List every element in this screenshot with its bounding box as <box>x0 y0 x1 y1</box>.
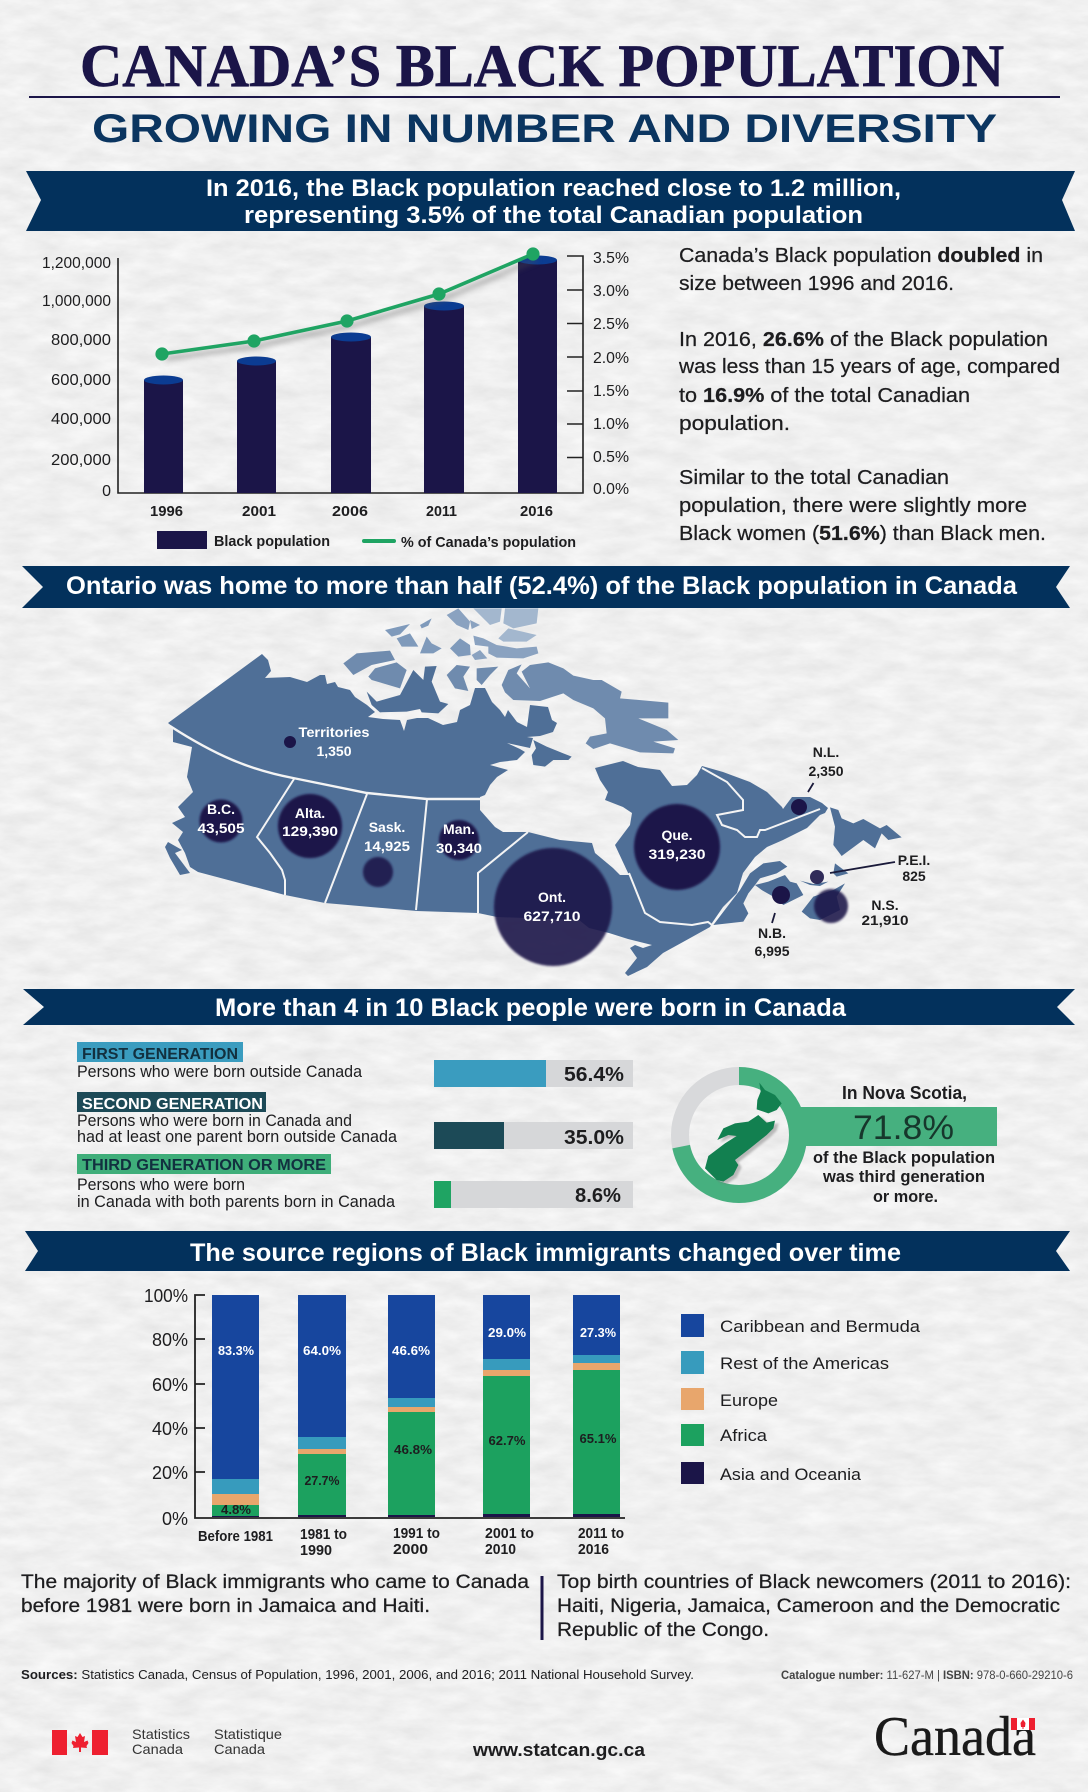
y axis labels: 60% <box>152 1375 188 1395</box>
text block: key facts: Canada’s Black population doubled in <box>679 244 1043 267</box>
province labels: 6,995 <box>754 943 790 959</box>
segment values: 27.3% <box>580 1325 616 1340</box>
text block: top birth countries: Republic of the Congo. <box>557 1620 769 1641</box>
period labels: 1990 <box>300 1542 332 1559</box>
period labels <box>198 1525 624 1559</box>
province labels <box>198 724 930 959</box>
Vancouver Island and eastern provinces <box>165 807 902 925</box>
banner: source regions: The source regions of Black immigrants changed over time <box>190 1239 901 1267</box>
right axis labels: 0.0% <box>593 481 629 498</box>
province labels: 1,350 <box>316 743 352 759</box>
left axis labels: 600,000 <box>51 372 111 389</box>
bar: 1981 to 1990 <box>298 1295 346 1517</box>
x axis labels: 2001 <box>242 503 276 520</box>
legend: regions: Africa <box>720 1426 768 1445</box>
subtitle: GROWING IN NUMBER AND DIVERSITY <box>92 107 997 151</box>
legend: regions: Rest of the Americas <box>720 1354 889 1373</box>
callout: Nova Scotia: of the Black population <box>813 1148 995 1167</box>
Statistics Canada logo: Statistique <box>214 1726 282 1742</box>
Statistics Canada logo: Canada <box>132 1741 183 1757</box>
province labels: 627,710 <box>524 908 581 924</box>
period labels: 2001 to <box>485 1525 534 1542</box>
chart legend <box>157 531 576 551</box>
Canada wordmark: Canada <box>874 1706 1036 1768</box>
segment values: 46.6% <box>392 1343 430 1358</box>
text block: top birth countries <box>557 1572 1071 1641</box>
third generation <box>77 1154 633 1211</box>
y axis labels: 40% <box>152 1419 188 1439</box>
callout: Nova Scotia: or more. <box>873 1187 938 1206</box>
right axis labels: 0.5% <box>593 449 629 466</box>
bars <box>144 260 557 493</box>
province labels: N.S. <box>871 897 899 913</box>
x axis labels: 1996 <box>150 503 183 520</box>
second generation: Persons who were born in Canada and <box>77 1112 352 1130</box>
banner: born in Canada: More than 4 in 10 Black people were born in Canada <box>215 994 847 1022</box>
banner: population headline: representing 3.5% of the total Canadian population <box>244 202 863 229</box>
banner: population headline: In 2016, the Black population reached close to 1.2 million, <box>206 175 901 202</box>
left axis labels: 1,200,000 <box>42 255 111 272</box>
right axis labels: 3.0% <box>593 283 629 300</box>
province labels: Man. <box>443 821 475 837</box>
left axis labels: 1,000,000 <box>42 293 111 310</box>
segment values: 64.0% <box>303 1343 341 1358</box>
text block: key facts: Similar to the total Canadian <box>679 466 949 489</box>
Statistics Canada logo: Statistics <box>132 1726 190 1742</box>
banner: born in Canada <box>23 989 1075 1025</box>
right axis labels: 1.5% <box>593 383 629 400</box>
callout: Nova Scotia: was third generation <box>822 1167 985 1186</box>
chart legend: % of Canada’s population <box>401 534 576 551</box>
catalogue number: Catalogue number: 11-627-M | ISBN: 978-0-660-29210-6 <box>781 1670 1073 1682</box>
text block: key facts: was less than 15 years of age, compared <box>678 355 1060 378</box>
province labels: Ont. <box>538 889 566 905</box>
bar: 2001 to 2010 <box>483 1295 530 1517</box>
province labels: B.C. <box>207 801 235 817</box>
province labels: Sask. <box>369 819 405 835</box>
province labels: 319,230 <box>648 846 706 862</box>
text block: before 1981 note <box>21 1572 529 1617</box>
second generation <box>77 1092 633 1149</box>
line: percent of population <box>155 247 540 361</box>
period labels: 2011 to <box>578 1525 624 1542</box>
panel: generation status <box>77 1042 633 1211</box>
text block: key facts: Black women ( 51.6%) than Black men. <box>679 522 1046 545</box>
province labels: 825 <box>902 868 926 884</box>
population circles <box>200 736 848 966</box>
callout: Nova Scotia: In Nova Scotia, <box>842 1083 967 1103</box>
text block: before 1981 note: before 1981 were born in Jamaica and Haiti. <box>21 1596 430 1617</box>
map of Canada with provincial populations <box>165 608 930 976</box>
first generation: 56.4% <box>564 1064 624 1086</box>
period labels: 2016 <box>578 1541 609 1558</box>
segment values: 29.0% <box>488 1325 526 1340</box>
second generation: SECOND GENERATION <box>82 1096 263 1113</box>
Statistics Canada logo: Canada <box>214 1741 265 1757</box>
left axis labels: 800,000 <box>51 332 111 349</box>
period labels: 1991 to <box>393 1525 440 1542</box>
province labels: 129,390 <box>282 823 338 839</box>
third generation: 8.6% <box>575 1185 621 1207</box>
right axis labels: 2.0% <box>593 350 629 367</box>
legend: regions <box>681 1314 921 1484</box>
text block: before 1981 note: The majority of Black immigrants who came to Canada <box>21 1572 529 1593</box>
segment values: 4.8% <box>221 1502 251 1517</box>
sources: Sources: Statistics Canada, Census of Population, 1996, 2001, 2006, and 2016; 2011 National Household Survey. <box>21 1667 694 1682</box>
banner: population headline <box>26 171 1075 231</box>
text block: key facts: population, there were slightly more <box>679 494 1027 517</box>
third generation: THIRD GENERATION OR MORE <box>82 1157 326 1174</box>
province labels: Territories <box>298 724 370 740</box>
segment values <box>218 1325 617 1517</box>
segment values: 65.1% <box>580 1431 617 1446</box>
text block: key facts <box>678 244 1060 545</box>
white provincial borders <box>170 726 820 925</box>
left axis labels <box>42 255 111 500</box>
period labels: 2000 <box>393 1541 428 1558</box>
y axis labels: 100% <box>144 1286 188 1306</box>
donut gauge <box>680 1076 997 1194</box>
x axis labels: 2011 <box>426 503 457 520</box>
province labels: N.L. <box>813 744 839 760</box>
third generation: Persons who were born <box>77 1176 245 1194</box>
segment values: 46.8% <box>394 1442 432 1457</box>
y axis labels: 20% <box>152 1463 188 1483</box>
province labels: Alta. <box>295 805 325 821</box>
province labels: 43,505 <box>198 820 245 836</box>
right axis labels: 2.5% <box>593 316 629 333</box>
bar: 1991 to 2000 <box>388 1295 435 1517</box>
right axis labels: 1.0% <box>593 416 629 433</box>
province labels: 2,350 <box>808 763 844 779</box>
x axis labels <box>150 503 553 520</box>
first generation: FIRST GENERATION <box>82 1046 238 1063</box>
callout: Nova Scotia <box>680 1076 997 1206</box>
y axis labels <box>144 1286 188 1529</box>
province labels: 14,925 <box>364 838 410 854</box>
text block: key facts: In 2016, 26.6% of the Black population <box>679 328 1048 351</box>
right axis labels <box>593 250 629 498</box>
left axis labels: 0 <box>102 483 111 500</box>
text block: top birth countries: Top birth countries of Black newcomers (2011 to 2016): <box>557 1572 1071 1593</box>
segment values: 83.3% <box>218 1343 254 1358</box>
legend: regions: Caribbean and Bermuda <box>720 1317 921 1336</box>
text block: key facts: population. <box>679 412 790 435</box>
Statistics Canada logo <box>52 1726 282 1757</box>
period labels: 1981 to <box>300 1526 347 1543</box>
banner: Ontario: Ontario was home to more than half (52.4%) of the Black population in Canada <box>66 572 1018 600</box>
title: CANADA’S BLACK POPULATION <box>80 33 1004 99</box>
province labels: P.E.I. <box>898 852 930 868</box>
mainland <box>168 654 828 976</box>
period labels: Before 1981 <box>198 1528 273 1545</box>
text block: key facts: to 16.9% of the total Canadian <box>679 384 970 407</box>
x axis labels: 2016 <box>520 503 553 520</box>
segment values: 27.7% <box>304 1473 340 1488</box>
province labels: N.B. <box>758 925 786 941</box>
third generation: in Canada with both parents born in Canada <box>77 1193 396 1211</box>
text block: top birth countries: Haiti, Nigeria, Jamaica, Cameroon and the Democratic <box>557 1596 1060 1617</box>
chart legend: Black population <box>214 533 330 550</box>
x axis labels: 2006 <box>332 503 368 520</box>
northern islands <box>343 608 678 767</box>
bar: 2011 to 2016 <box>573 1295 620 1517</box>
segment values: 62.7% <box>488 1433 526 1448</box>
icon: Nova Scotia map <box>705 1083 782 1184</box>
website: www.statcan.gc.ca <box>472 1740 646 1760</box>
leader lines <box>772 783 895 923</box>
bar: before 1981 <box>212 1295 259 1517</box>
province labels: Que. <box>661 827 693 843</box>
y axis labels: 80% <box>152 1330 188 1350</box>
text block: key facts: size between 1996 and 2016. <box>679 272 954 295</box>
banner: Ontario <box>22 566 1070 608</box>
left axis labels: 200,000 <box>51 452 111 469</box>
legend: regions: Europe <box>720 1391 778 1410</box>
right axis labels: 3.5% <box>593 250 629 267</box>
legend: regions: Asia and Oceania <box>720 1465 862 1484</box>
province labels: 21,910 <box>862 912 909 928</box>
panel: population combo chart <box>42 247 629 551</box>
first generation <box>77 1042 633 1087</box>
left axis labels: 400,000 <box>51 411 111 428</box>
period labels: 2010 <box>485 1541 516 1558</box>
second generation: had at least one parent born outside Canada <box>77 1128 398 1146</box>
callout: Nova Scotia: 71.8% <box>853 1109 954 1147</box>
second generation: 35.0% <box>564 1127 624 1149</box>
first generation: Persons who were born outside Canada <box>77 1063 363 1081</box>
y axis labels: 0% <box>162 1509 188 1529</box>
banner: source regions <box>25 1231 1070 1271</box>
province labels: 30,340 <box>436 840 482 856</box>
stacked bar chart: source regions <box>144 1286 625 1559</box>
